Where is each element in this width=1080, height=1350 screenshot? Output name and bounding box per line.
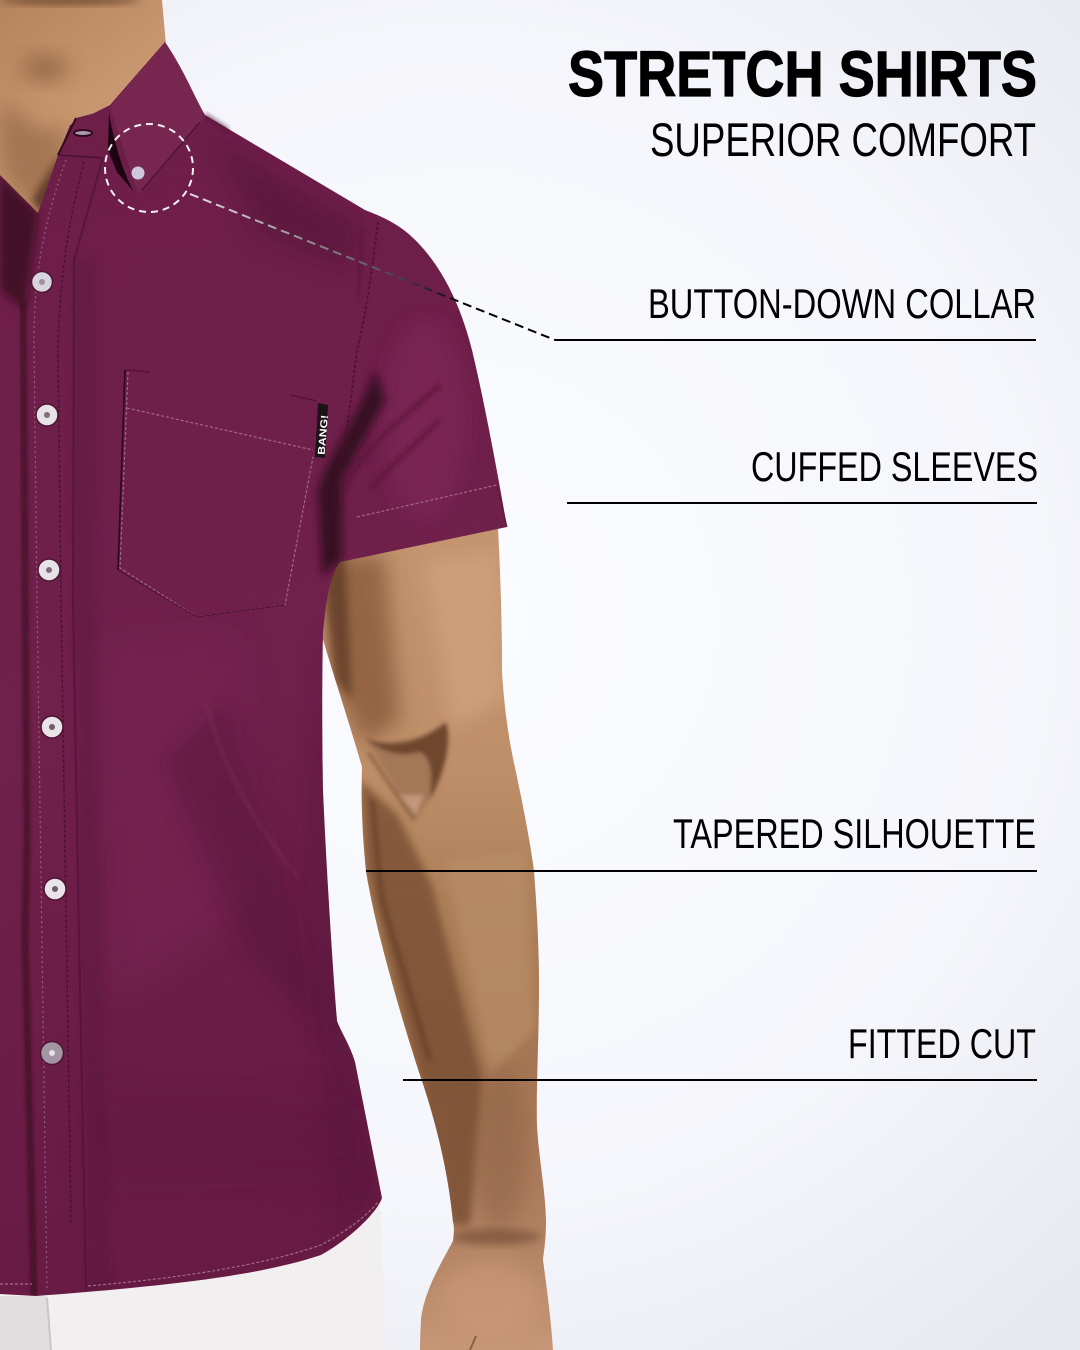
button 4 — [41, 716, 63, 738]
photo: man wearing shirt — [0, 0, 553, 1350]
hairy shading — [476, 1076, 528, 1226]
brand tag: BANG! — [317, 414, 331, 455]
placket right shadow — [78, 267, 108, 1292]
sleeve creases — [345, 385, 440, 490]
forearm dark side — [360, 780, 482, 1225]
upper arm shadow — [320, 555, 400, 745]
wrist crease — [450, 1229, 540, 1245]
placket stitching — [34, 160, 66, 1290]
pocket — [118, 370, 317, 617]
body fold shadow — [170, 712, 309, 1006]
placket edge — [73, 158, 103, 1290]
collar buttonhole — [74, 130, 92, 136]
shirt buttons — [32, 272, 66, 1064]
armpit shadow — [318, 370, 385, 575]
button 2 — [36, 404, 58, 426]
button 6 — [40, 1042, 64, 1064]
button 3 — [38, 559, 60, 581]
collar — [58, 42, 228, 194]
elbow fold — [365, 722, 448, 820]
button 1 — [32, 272, 52, 292]
callout: dashed collar circle — [105, 124, 193, 212]
shoulder shade — [228, 155, 356, 262]
left shirt panel top shadow — [0, 175, 38, 310]
shirt body — [0, 42, 507, 1296]
lower body shade — [90, 1090, 370, 1180]
neck skin — [0, 0, 166, 218]
callout: dashed leader line — [190, 194, 555, 340]
button 5 — [44, 878, 66, 900]
brand tag — [315, 403, 331, 458]
body light panel — [100, 640, 260, 1000]
white trousers — [0, 1205, 386, 1350]
side shade — [308, 686, 368, 1129]
cuff stitching — [357, 485, 497, 517]
sleeve seam — [340, 222, 378, 460]
placket left edge shadow — [23, 300, 34, 1296]
forearm light side — [457, 878, 534, 1070]
hem stitching — [0, 1202, 378, 1286]
arm — [320, 510, 553, 1350]
collar button — [132, 166, 144, 180]
sleeve highlight — [390, 330, 460, 508]
upper arm highlight — [432, 558, 504, 720]
